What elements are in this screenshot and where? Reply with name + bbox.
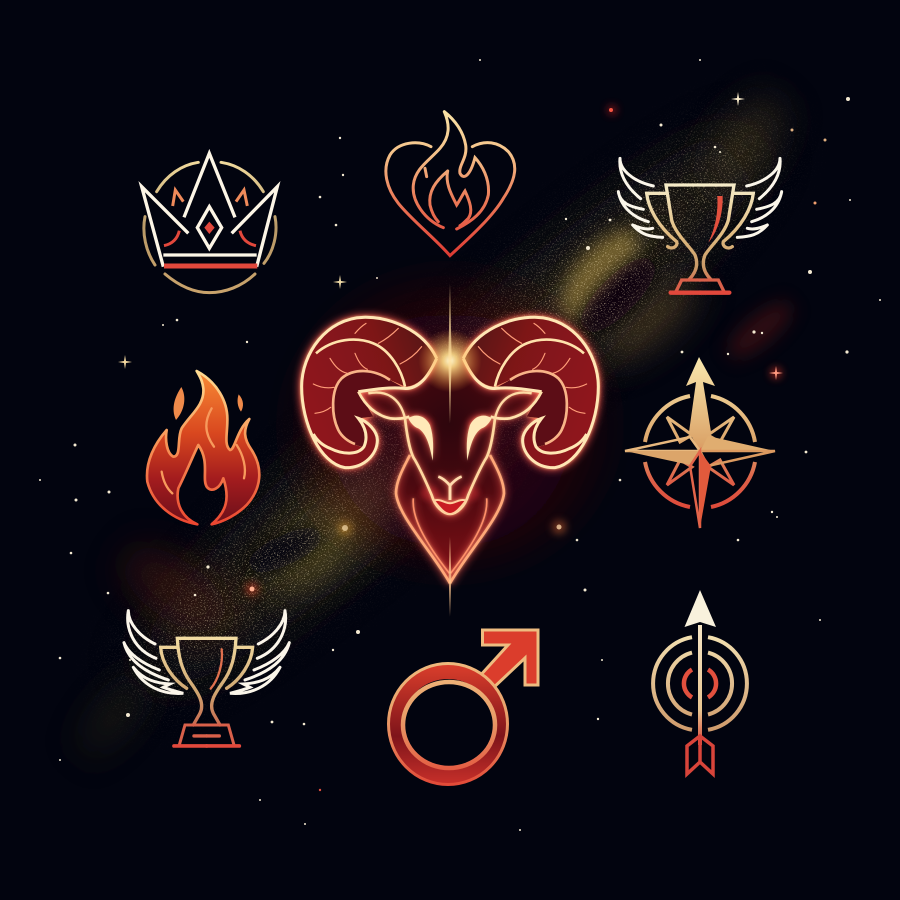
- icon: flame: [147, 371, 259, 524]
- bright glowing stars: [118, 92, 783, 596]
- ram mouth: [434, 500, 466, 514]
- icon: mars symbol: [388, 630, 538, 784]
- compass diagonal points: [667, 417, 734, 485]
- heart outline: [386, 143, 515, 256]
- icon: compass star: [625, 357, 775, 528]
- central ram head: [302, 283, 598, 617]
- crown red details: [164, 190, 257, 266]
- compass ring: [645, 396, 755, 507]
- flame licks: [162, 408, 245, 493]
- trophy left half: [124, 611, 207, 746]
- mars arrow: [478, 630, 538, 690]
- trophy highlight: [211, 649, 222, 689]
- icon: flaming heart: [386, 112, 515, 256]
- star: gold sparkle top centre: [333, 275, 347, 289]
- heart flame inner: [430, 171, 471, 226]
- arrow head: [684, 590, 716, 627]
- compass arrow and star: [625, 357, 775, 528]
- trophy right half: [700, 158, 782, 293]
- milky way band: [71, 85, 800, 764]
- icon: crown in ring: [142, 153, 277, 293]
- mars ring: [388, 664, 508, 784]
- arrow shaft: [698, 625, 702, 745]
- star dust: [94, 88, 804, 732]
- flame body: [147, 371, 259, 524]
- crown ring arcs: [144, 162, 276, 293]
- icon: arrow through target: [653, 590, 747, 774]
- flame droplets: [174, 387, 243, 420]
- crown outline: [142, 153, 277, 267]
- arrow fletching: [687, 736, 713, 774]
- ram cheek glow: [412, 417, 488, 501]
- ram halo: [285, 275, 615, 565]
- ram face fill: [358, 358, 542, 583]
- target rings: [653, 637, 747, 730]
- trophy highlight: [708, 196, 723, 243]
- heart flame outer: [413, 112, 489, 229]
- centre flare: [418, 283, 482, 617]
- icon: winged trophy bottom left: [124, 611, 289, 746]
- icon: winged trophy top right: [618, 158, 782, 293]
- trophy right half: [207, 611, 289, 746]
- target centre: [684, 670, 716, 697]
- trophy left half: [618, 158, 700, 293]
- ram lines with glow: [302, 317, 598, 583]
